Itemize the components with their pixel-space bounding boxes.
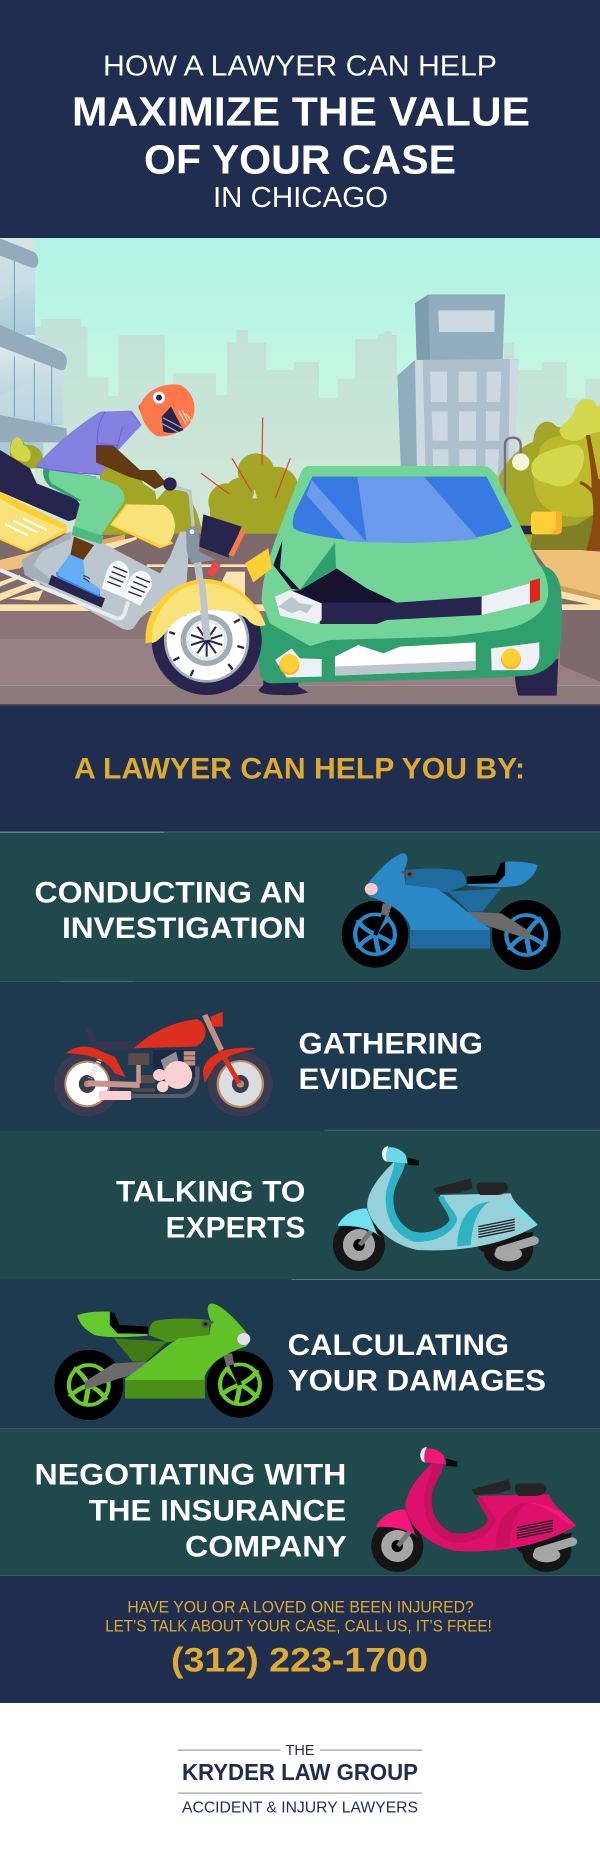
panel text: THE INSURANCE [89, 1494, 346, 1528]
city skyline [35, 319, 600, 552]
rider leg [70, 537, 94, 560]
car smashed headlight [275, 590, 322, 624]
hero illustration: motorcycle and car crash [0, 238, 600, 704]
panel text: NEGOTIATING WITH [34, 1458, 346, 1492]
panel: talking to experts [0, 1130, 600, 1280]
street lamp [505, 438, 529, 498]
car left fog light [275, 648, 322, 677]
helmet [138, 384, 194, 436]
handlebar [163, 477, 193, 528]
title line 1: HOW A LAWYER CAN HELP [103, 50, 497, 82]
panel: negotiating with the insurance company [0, 1429, 600, 1576]
icon: green sport motorcycle [54, 1303, 273, 1420]
panel text [116, 1176, 305, 1244]
title line 3: OF YOUR CASE [144, 136, 456, 182]
panel text: GATHERING [298, 1027, 483, 1060]
panel text: YOUR DAMAGES [288, 1365, 546, 1398]
car right fog light [491, 642, 539, 670]
panel: calculating your damages [0, 1279, 600, 1429]
call to action text [105, 1598, 492, 1636]
logo: the kryder law group: ACCIDENT & INJURY LAWYERS [182, 1799, 418, 1816]
headlamp [199, 514, 246, 577]
foot board [48, 575, 105, 608]
panel: gathering evidence [0, 981, 600, 1131]
panel text: CALCULATING [288, 1329, 509, 1362]
icon: pink scooter [371, 1447, 576, 1572]
car rear tires [258, 658, 558, 696]
rider shoe [56, 554, 100, 597]
motorcycle [0, 384, 272, 695]
car side mirror [520, 512, 562, 534]
hood and grill [273, 541, 482, 624]
icon: red cruiser motorcycle [55, 1010, 273, 1116]
panel: conducting an investigation [0, 832, 600, 981]
rider pants [43, 468, 125, 544]
glass building [0, 238, 67, 456]
call to action text: LET’S TALK ABOUT YOUR CASE, CALL US, IT’S FREE! [105, 1617, 492, 1636]
street ground [0, 533, 600, 704]
panel text [34, 1458, 347, 1564]
title line 2: MAXIMIZE THE VALUE [72, 88, 530, 134]
trees [498, 399, 600, 551]
panel text: INVESTIGATION [62, 912, 306, 945]
panel text [298, 1027, 483, 1096]
header band [0, 0, 600, 238]
car body upper [262, 466, 548, 646]
car right headlight [482, 578, 540, 615]
front fork [186, 525, 216, 640]
panel text: EXPERTS [166, 1211, 305, 1244]
foot pegs [102, 561, 152, 606]
logo: the kryder law group [178, 1743, 422, 1816]
panel text: CONDUCTING AN [34, 876, 306, 909]
sky [0, 238, 600, 538]
call to action band [0, 1576, 600, 1703]
call to action text: HAVE YOU OR A LOVED ONE BEEN INJURED? [127, 1598, 474, 1617]
left bushes [10, 437, 300, 535]
phone number: (312) 223-1700 [171, 1642, 428, 1680]
panel text: TALKING TO [116, 1176, 305, 1208]
heading text: A LAWYER CAN HELP YOU BY: [74, 752, 525, 785]
tower head [415, 294, 505, 360]
panel text: EVIDENCE [298, 1063, 458, 1096]
panel text [34, 876, 306, 945]
car body lower [259, 565, 562, 683]
icon: blue sport motorcycle [342, 853, 561, 970]
panel text: COMPANY [185, 1530, 347, 1564]
title line 4: IN CHICAGO [213, 182, 388, 214]
logo: the kryder law group: KRYDER LAW GROUP [182, 1759, 418, 1785]
panel text [288, 1329, 546, 1398]
motorcycle tank [110, 503, 173, 548]
rider shirt [35, 411, 142, 476]
front wheel [152, 610, 262, 695]
tower body [397, 359, 518, 488]
fork front leg [202, 580, 207, 632]
logo: the kryder law group: THE [286, 1743, 315, 1759]
front fender [146, 579, 266, 643]
windshield [293, 477, 512, 543]
motorcycle frame [0, 532, 190, 630]
car front bumper [335, 642, 476, 676]
sidewalk [533, 550, 600, 610]
motorcycle rear body [0, 450, 81, 552]
section band: heading [0, 704, 600, 832]
turn signal [245, 548, 272, 582]
icon: teal scooter [333, 1146, 538, 1271]
rider arm [96, 445, 167, 489]
impact lines [201, 418, 290, 498]
